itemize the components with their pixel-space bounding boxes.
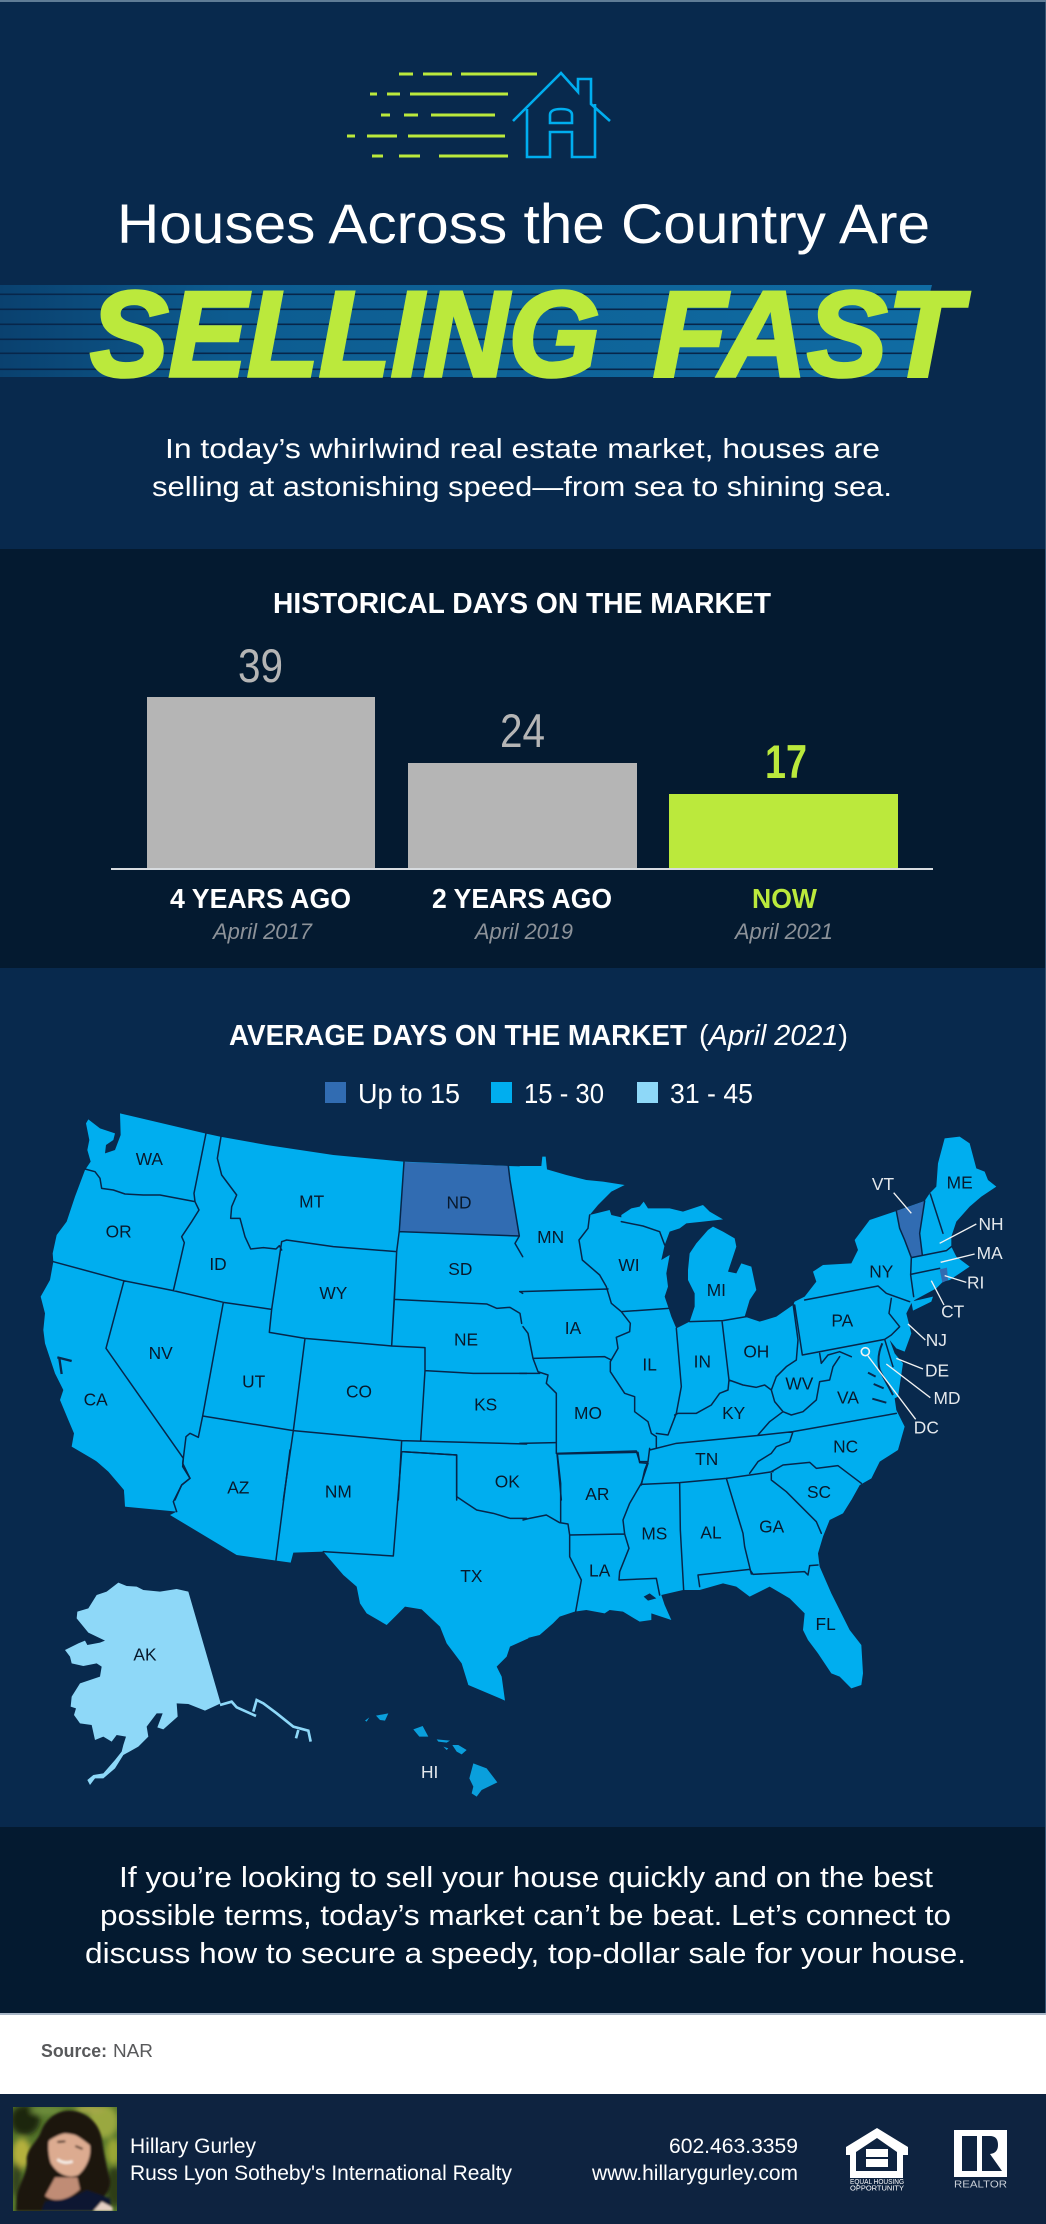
source text: NAR — [113, 2041, 153, 2061]
state labels: IA — [565, 1318, 582, 1338]
state labels: VA — [837, 1387, 859, 1407]
state labels: OR — [106, 1222, 132, 1242]
state labels: ID — [209, 1254, 227, 1274]
icon: equal housing opportunity: OPPORTUNITY — [850, 2184, 904, 2192]
source text — [41, 2041, 153, 2061]
map: contiguous land — [41, 1113, 996, 1701]
intro text: selling at astonishing speed—from sea to shining sea. — [152, 471, 892, 502]
callouts: small northeast states — [861, 1174, 1004, 1437]
panel: source — [0, 2015, 1046, 2094]
state labels: TX — [460, 1566, 483, 1586]
bar: 2 years ago: 2 YEARS AGO — [432, 883, 612, 914]
legend: Up to 15 — [358, 1078, 460, 1109]
agent name and brokerage: Russ Lyon Sotheby's International Realty — [130, 2162, 512, 2185]
bar: now — [669, 735, 898, 944]
panel: average days on the market — [0, 968, 1046, 1827]
state labels: NV — [149, 1343, 173, 1363]
state labels: AZ — [227, 1478, 250, 1498]
state labels: IN — [694, 1351, 711, 1371]
state labels — [84, 1149, 973, 1634]
state labels: NM — [325, 1481, 352, 1501]
agent name and brokerage: Hillary Gurley — [130, 2135, 256, 2158]
state: Hawaii: HI — [421, 1762, 438, 1782]
panel: agent footer — [0, 2094, 1046, 2224]
callouts: small northeast states: RI — [967, 1272, 984, 1292]
state labels: TN — [695, 1449, 718, 1469]
title line: Houses Across the Country Are — [117, 192, 930, 255]
state labels: OH — [743, 1341, 769, 1361]
state: Hawaii — [365, 1713, 497, 1797]
state labels: MS — [641, 1523, 667, 1543]
state labels: OK — [495, 1472, 520, 1492]
state labels: ME — [947, 1172, 973, 1192]
bar: 2 years ago: April 2019 — [473, 919, 573, 944]
bar: now: NOW — [752, 883, 818, 914]
state labels: KY — [722, 1403, 746, 1423]
state labels: MN — [537, 1227, 564, 1247]
state: Alaska — [65, 1583, 311, 1785]
callouts: small northeast states: NJ — [926, 1330, 947, 1350]
closing text: If you’re looking to sell your house quickly and on the best — [119, 1862, 933, 1894]
state labels: NY — [869, 1261, 894, 1281]
callouts: small northeast states: NH — [978, 1214, 1004, 1234]
legend: 15 - 30 — [524, 1078, 604, 1109]
source text: Source: — [41, 2041, 107, 2061]
state labels: GA — [759, 1516, 785, 1536]
state labels: CA — [84, 1390, 108, 1410]
bar: now: April 2021 — [733, 919, 833, 944]
bar: 4 years ago: April 2017 — [211, 919, 313, 944]
closing text: discuss how to secure a speedy, top-dollar sale for your house. — [85, 1938, 966, 1970]
state labels: AL — [700, 1522, 722, 1542]
state labels: SD — [448, 1259, 472, 1279]
state labels: ND — [446, 1193, 472, 1213]
heading: AVERAGE DAYS ON THE MARKET — [229, 1020, 687, 1052]
state labels: AR — [585, 1484, 609, 1504]
state labels: NC — [833, 1437, 858, 1457]
state labels: SC — [807, 1482, 831, 1502]
closing text: possible terms, today’s market can’t be beat. Let’s connect to — [100, 1900, 951, 1932]
intro text — [152, 433, 892, 502]
agent photo — [13, 2107, 117, 2211]
bar chart — [111, 639, 933, 944]
state labels: IL — [642, 1355, 657, 1375]
icon: equal housing opportunity: EQUAL HOUSING — [850, 2177, 904, 2186]
bar: 4 years ago: 39 — [238, 639, 283, 692]
callouts: small northeast states: VT — [872, 1174, 894, 1194]
callouts: small northeast states: MA — [977, 1243, 1003, 1263]
panel: historical days on the market — [0, 549, 1046, 968]
legend: 31 - 45 — [670, 1078, 753, 1109]
state labels: MT — [299, 1191, 325, 1211]
icon: equal housing opportunity — [846, 2128, 908, 2192]
callouts: small northeast states: DE — [925, 1361, 949, 1381]
headline: selling fast: FAST — [653, 266, 970, 402]
state labels: MO — [574, 1403, 602, 1423]
icon: realtor: REALTOR — [954, 2180, 1007, 2190]
state labels: PA — [831, 1311, 854, 1331]
heading: (April 2021) — [699, 1020, 848, 1052]
callouts: small northeast states: MD — [934, 1388, 960, 1408]
map: shortest-market states ND VT RI — [400, 1162, 948, 1283]
state labels: UT — [242, 1371, 266, 1391]
panel: closing message — [0, 1827, 1046, 2014]
callouts: small northeast states: DC — [914, 1417, 939, 1437]
headline: selling fast: SELLING — [90, 266, 600, 402]
closing text — [85, 1862, 966, 1970]
speed band — [0, 285, 932, 377]
state labels: LA — [589, 1561, 611, 1581]
agent contact: www.hillarygurley.com — [591, 2162, 798, 2185]
state labels: MI — [707, 1280, 726, 1300]
headline: selling fast — [90, 266, 970, 402]
bar: 4 years ago — [147, 639, 375, 944]
state labels: KS — [474, 1395, 497, 1415]
state labels: WY — [319, 1283, 348, 1303]
map: bays and state borders — [53, 1133, 951, 1612]
legend — [325, 1078, 753, 1109]
callouts: small northeast states: CT — [941, 1301, 965, 1321]
panel: header — [0, 0, 1046, 549]
state labels: WV — [785, 1373, 814, 1393]
bar: 2 years ago: 24 — [500, 704, 545, 757]
icon: realtor — [954, 2130, 1007, 2190]
intro text: In today’s whirlwind real estate market, houses are — [165, 433, 880, 464]
bar: 4 years ago: 4 YEARS AGO — [170, 883, 351, 914]
state labels: NE — [454, 1330, 478, 1350]
bar: 2 years ago — [408, 704, 637, 944]
state labels: FL — [816, 1614, 836, 1634]
agent contact: 602.463.3359 — [669, 2135, 798, 2158]
agent contact — [591, 2135, 798, 2185]
icon: speeding house — [347, 73, 610, 157]
agent name and brokerage — [130, 2135, 512, 2185]
bar: now: 17 — [765, 735, 807, 788]
state: Alaska: AK — [133, 1645, 157, 1665]
US map — [41, 1113, 1004, 1797]
heading: HISTORICAL DAYS ON THE MARKET — [273, 588, 771, 620]
state labels: WI — [618, 1255, 640, 1275]
state labels: WA — [136, 1149, 163, 1169]
state labels: CO — [346, 1381, 372, 1401]
